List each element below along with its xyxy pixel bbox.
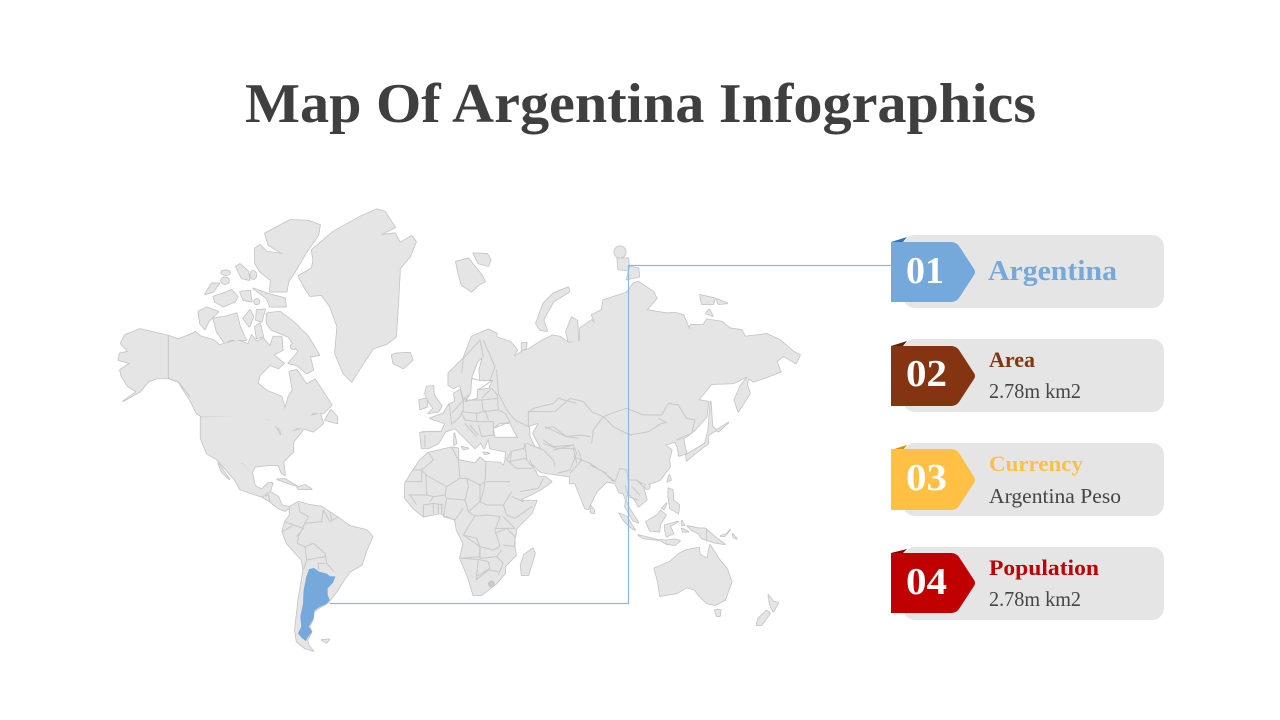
card 03: Currency (891, 443, 1164, 516)
value 2.78m km2: 2.78m km2 (989, 587, 1081, 611)
card 01: Argentina (891, 235, 1164, 308)
title: Map Of Argentina Infographics (245, 73, 1036, 135)
number 01: 01 (906, 250, 944, 292)
number 02: 02 (906, 353, 947, 395)
label Argentina: Argentina (988, 256, 1117, 287)
label Area: Area (989, 347, 1035, 372)
world map (118, 209, 800, 651)
country borders (168, 336, 707, 586)
arrow tag 04 (891, 553, 975, 613)
number 04: 04 (906, 561, 947, 603)
card 04: Population (891, 547, 1164, 620)
highlighted country: Argentina (298, 568, 335, 641)
card 02: Area (891, 339, 1164, 412)
tag fold 03 (891, 445, 907, 450)
number 03: 03 (906, 457, 947, 499)
inland seas (465, 378, 541, 448)
arrow tag 01 (891, 242, 975, 302)
arrow tag 02 (891, 346, 975, 406)
label Currency: Currency (989, 451, 1083, 476)
tag fold 02 (891, 341, 907, 346)
value Argentina Peso: Argentina Peso (989, 484, 1121, 508)
arrow tag 03 (891, 449, 975, 510)
tag fold 04 (891, 549, 907, 553)
tag fold 01 (891, 237, 907, 242)
land outline (118, 209, 800, 651)
land fill (118, 209, 800, 651)
value 2.78m km2: 2.78m km2 (989, 379, 1081, 403)
label Population: Population (989, 555, 1099, 580)
connector line from Argentina to label 01 (330, 266, 891, 604)
